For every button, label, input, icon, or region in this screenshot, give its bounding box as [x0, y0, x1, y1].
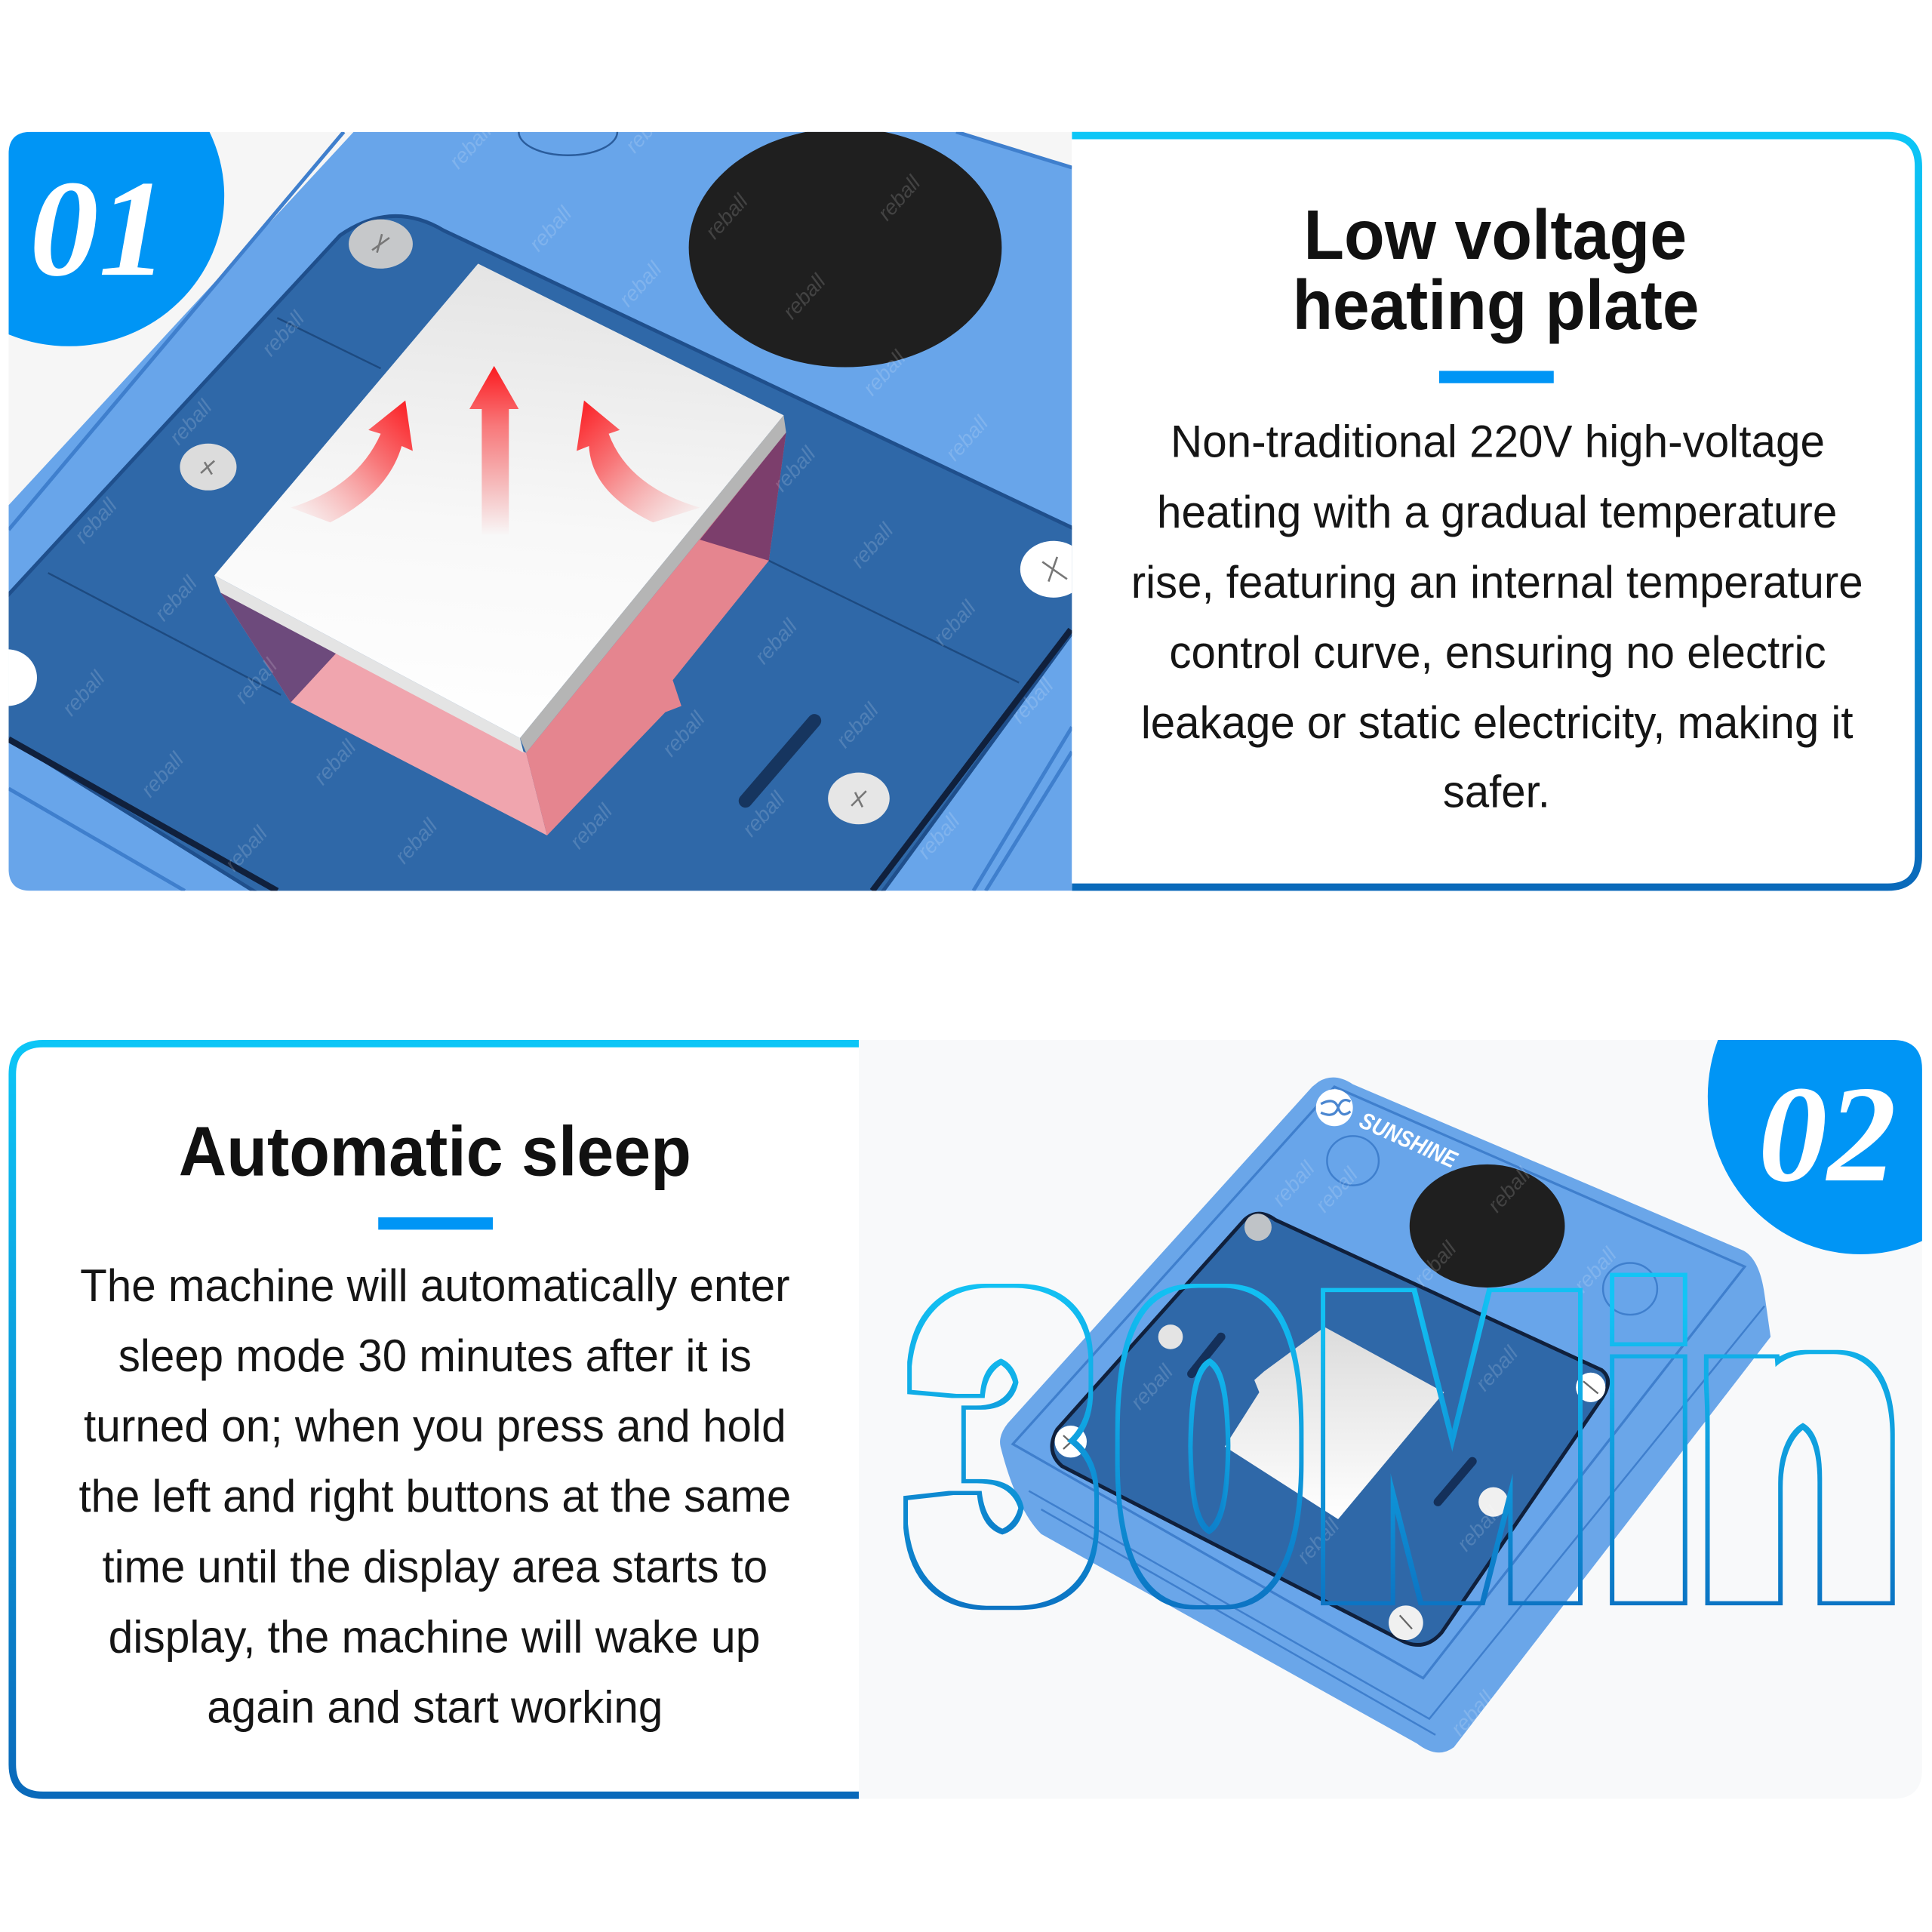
icon: red heat arrows: [291, 366, 700, 536]
watermarks: reball: [614, 257, 666, 311]
watermarks: reball: [1754, 1058, 1806, 1112]
logo: sunshine: [1316, 1089, 1462, 1174]
body text: [1131, 416, 1863, 817]
watermarks: reball: [750, 614, 802, 669]
watermarks: [1126, 1058, 1806, 1740]
heading: automatic sleep: Automatic sleep: [179, 1112, 691, 1191]
watermarks: reball: [69, 494, 122, 548]
watermarks: reball: [1311, 1162, 1363, 1217]
body text: safer.: [1443, 765, 1550, 817]
watermarks: reball: [1483, 1162, 1535, 1217]
watermarks: reball: [858, 346, 910, 400]
body text: rise, featuring an internal temperature: [1131, 556, 1863, 608]
badge 01: 01: [29, 152, 168, 305]
watermarks: reball: [1126, 1360, 1178, 1414]
watermarks: reball: [220, 821, 272, 875]
heading: low voltage heating plate: [1293, 195, 1699, 344]
watermarks: reball: [390, 814, 442, 868]
watermarks: reball: [150, 571, 202, 626]
watermarks: reball: [912, 809, 964, 863]
badge 02: [1708, 939, 1932, 1254]
watermarks: reball: [700, 189, 752, 243]
white square opening: [1225, 1327, 1444, 1519]
watermarks: reball: [445, 119, 497, 173]
button: [518, 131, 619, 156]
badge 01: [0, 45, 224, 346]
watermarks: reball: [1452, 1501, 1504, 1555]
screws: [0, 220, 1087, 824]
watermarks: reball: [165, 395, 217, 449]
watermarks: [57, 103, 1058, 875]
watermarks: reball: [620, 103, 672, 157]
panel: automatic sleep text card: [12, 1044, 859, 1795]
body text: again and start working: [207, 1681, 663, 1732]
accent bar: [378, 1217, 493, 1229]
slots: [1192, 1337, 1472, 1502]
body text: heating with a gradual temperature: [1157, 486, 1837, 537]
watermarks: reball: [657, 706, 709, 761]
watermarks: reball: [57, 666, 109, 720]
badge 02: 02: [1758, 1057, 1897, 1211]
watermarks: reball: [1446, 1686, 1498, 1740]
body text: display, the machine will wake up: [109, 1611, 760, 1662]
display circle: [689, 128, 1001, 368]
watermarks: reball: [525, 202, 577, 256]
logo: sunshine: SUNSHINE: [1355, 1107, 1462, 1174]
watermarks: reball: [137, 747, 189, 801]
plate: [1052, 1214, 1608, 1645]
watermarks: reball: [1006, 673, 1058, 728]
watermarks: reball: [1409, 1236, 1461, 1291]
device: [1000, 1078, 1770, 1752]
panel: heating plate photo: [8, 131, 1072, 891]
watermarks: reball: [257, 306, 309, 360]
screws: [1055, 1214, 1605, 1640]
body text: control curve, ensuring no electric: [1169, 626, 1826, 678]
body text: leakage or static electricity, making it: [1141, 697, 1854, 748]
body text: the left and right buttons at the same: [78, 1470, 791, 1521]
watermarks: reball: [928, 595, 980, 650]
watermarks: reball: [1292, 1514, 1344, 1567]
panel: 30 minute sleep photo: [859, 939, 1932, 1799]
white heating block: [214, 263, 786, 753]
watermarks: reball: [1569, 1242, 1621, 1297]
watermarks: reball: [941, 411, 993, 465]
body text: Non-traditional 220V high-voltage: [1171, 416, 1825, 467]
watermarks: reball: [831, 698, 883, 752]
body text: [78, 1260, 791, 1732]
watermarks: reball: [1267, 1156, 1319, 1211]
outlined 30Min text: 30Min: [912, 1214, 1899, 1678]
accent bar: [1439, 371, 1554, 383]
watermarks: reball: [768, 441, 820, 496]
panel: low voltage text card: [1072, 136, 1918, 888]
body text: The machine will automatically enter: [80, 1260, 790, 1311]
body text: turned on; when you press and hold: [84, 1400, 786, 1451]
heating plate recess: [0, 216, 1084, 906]
buttons: [1327, 1136, 1657, 1315]
watermarks: reball: [778, 269, 830, 324]
display circle: [1410, 1164, 1564, 1287]
watermarks: reball: [873, 171, 925, 225]
body text: time until the display area starts to: [103, 1540, 768, 1592]
watermarks: reball: [230, 654, 282, 708]
device body: [8, 132, 1072, 891]
pink heating well: [220, 432, 786, 835]
watermarks: reball: [1471, 1341, 1523, 1395]
slot: [746, 721, 814, 801]
watermarks: reball: [737, 786, 789, 841]
watermarks: reball: [565, 799, 617, 854]
body text: sleep mode 30 minutes after it is: [118, 1330, 752, 1381]
heading: low voltage heating plate: Low voltage: [1303, 195, 1687, 274]
watermarks: reball: [846, 518, 898, 572]
watermarks: reball: [309, 735, 361, 789]
heading: low voltage heating plate: heating plate: [1293, 266, 1699, 344]
